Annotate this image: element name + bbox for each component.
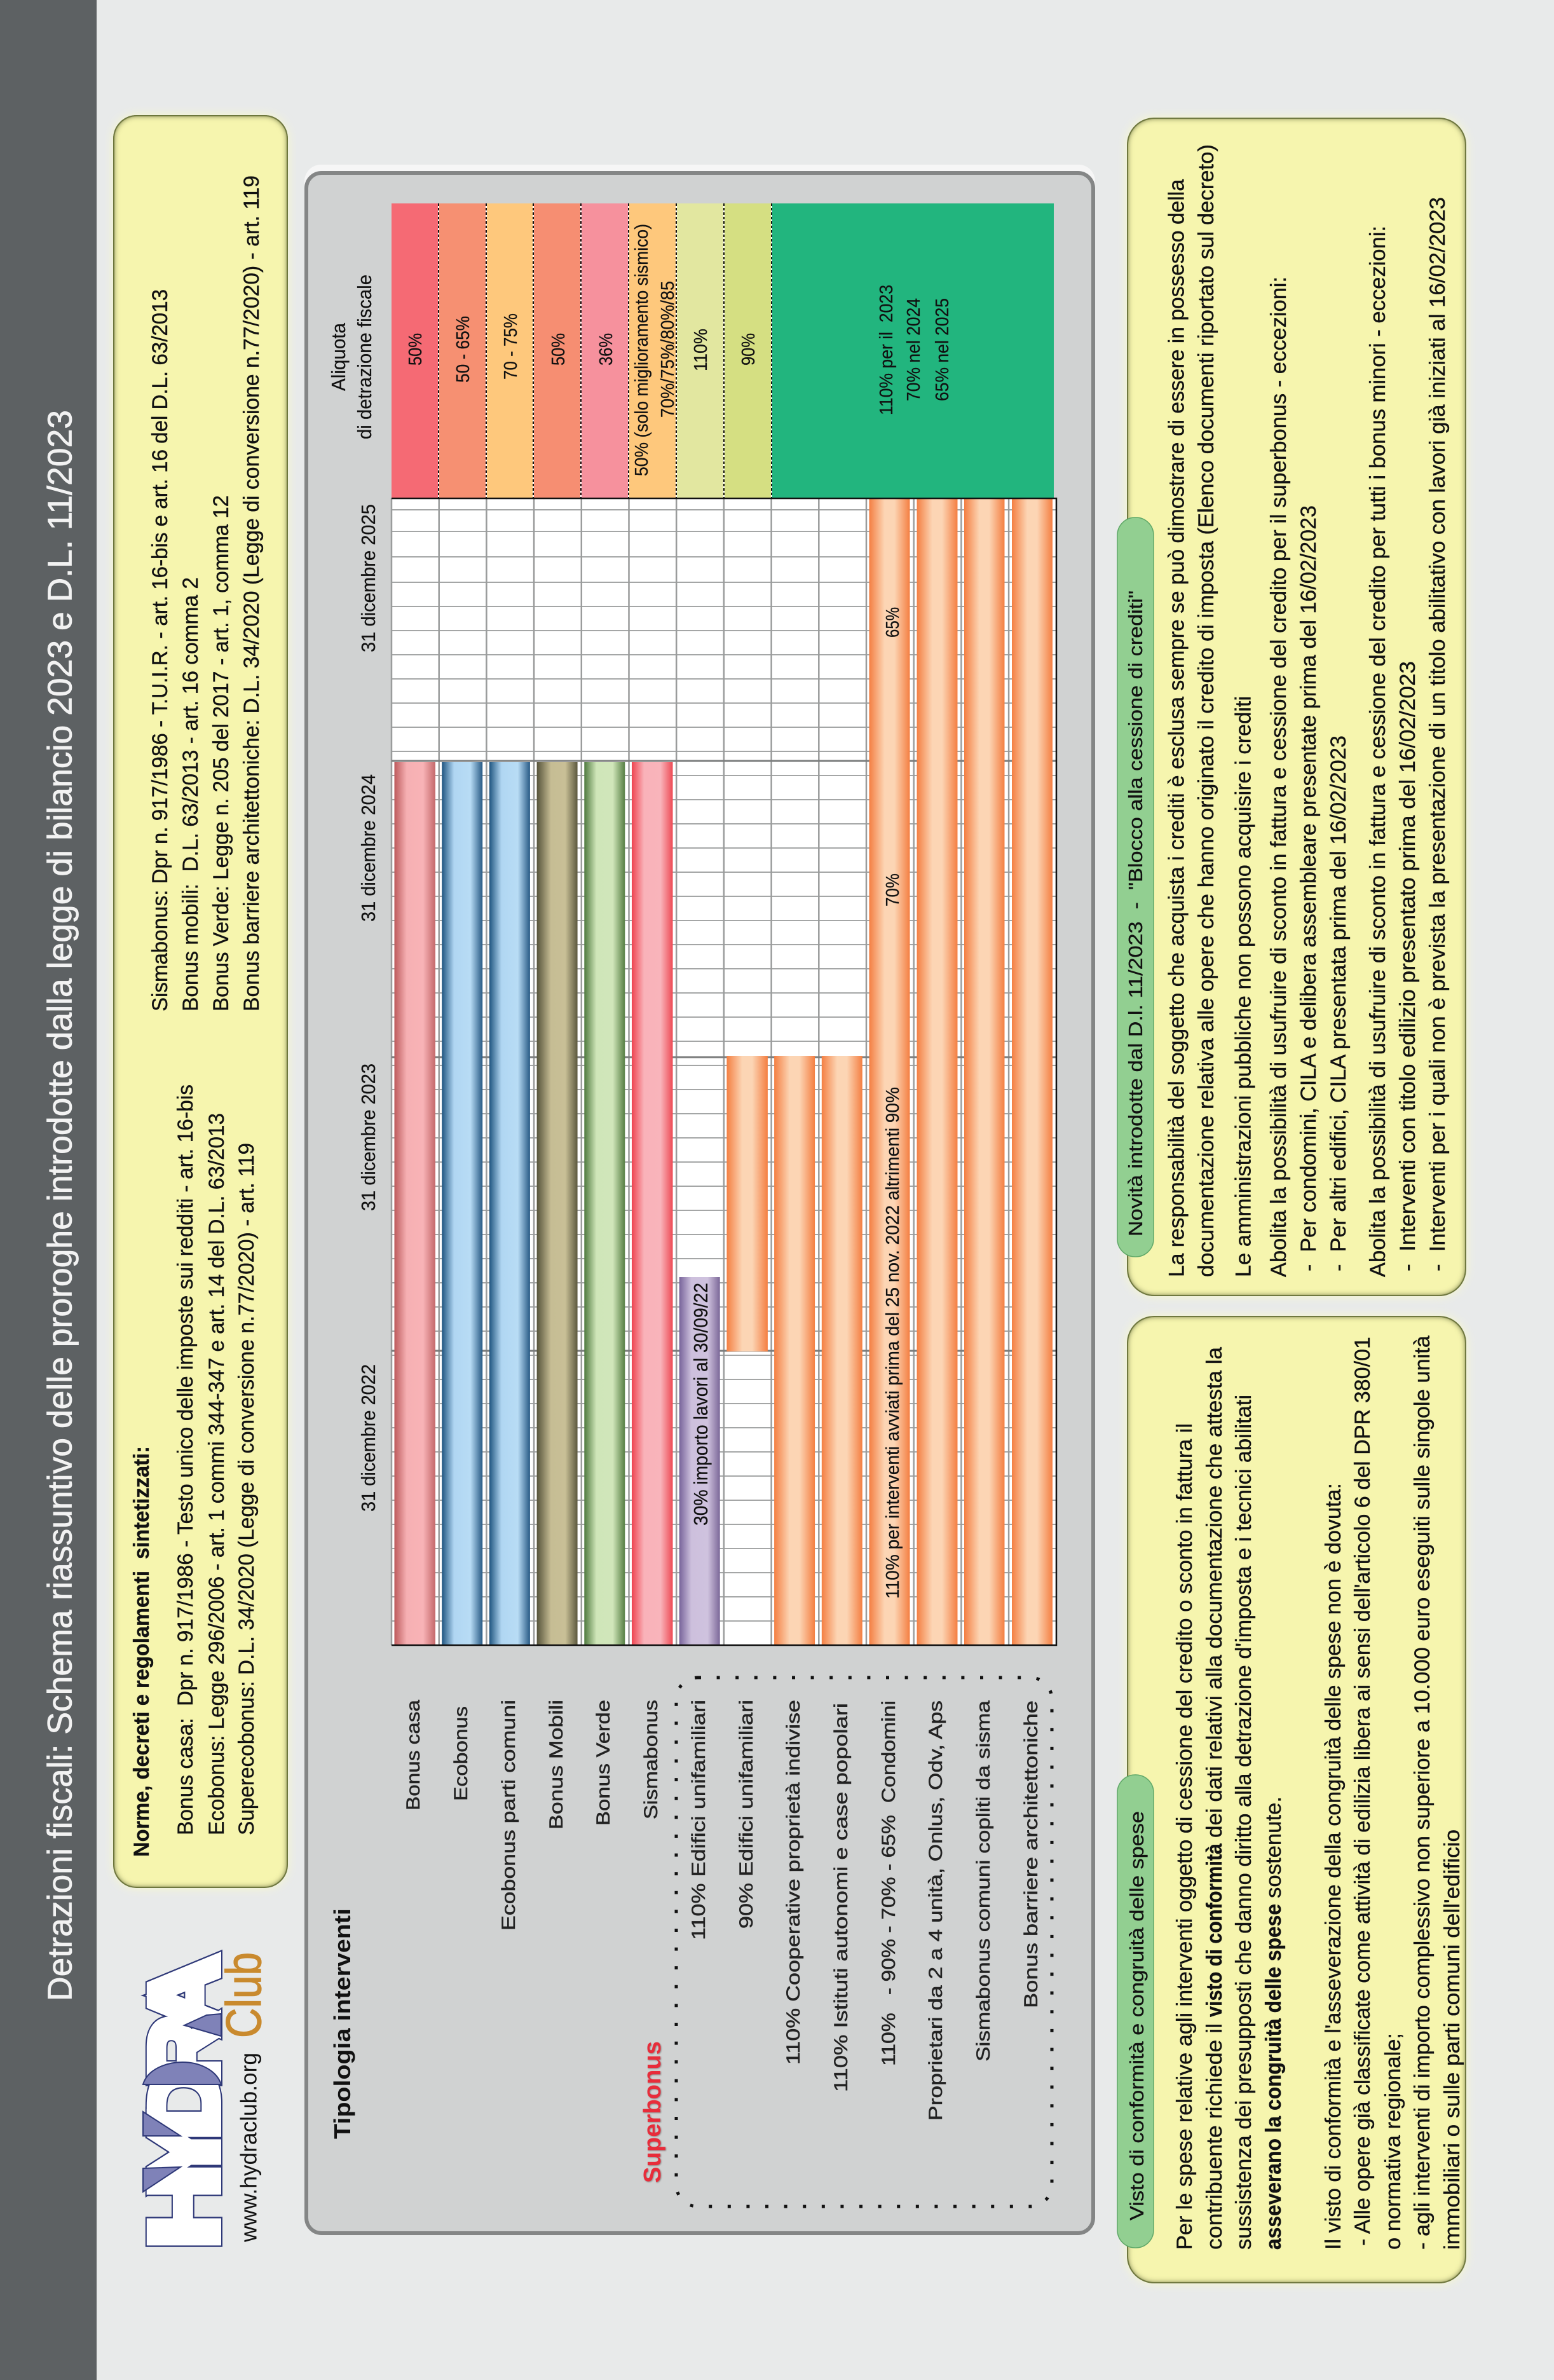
date axis labels: 31 dicembre 2023 (357, 1063, 379, 1211)
heading: norme: Norme, decreti e regolamenti sintetizzati: (130, 1446, 154, 1857)
bar: Bonus Verde (584, 762, 625, 1645)
aliquota values: 70% nel 2024 (904, 298, 924, 401)
text block: norme right column: Sismabonus: Dpr n. 917/1986 - T.U.I.R. - art. 16-bis e art. 16 del D.L. 63/2013 (148, 289, 172, 1011)
aliquota values: 110% (691, 329, 711, 371)
aliquota values: 50% (549, 333, 569, 366)
superbonus dotted group outline (676, 1678, 1052, 2206)
title: Detrazioni fiscali: Schema riassuntivo delle proroghe introdotte dalla legge di bilancio 2023 e D.L. 11/2023 (41, 410, 79, 2001)
bar: sismabonus comuni (964, 499, 1004, 1645)
text block: visto body: immobiliari o sulle parti comuni dell'edificio (1440, 1829, 1464, 2250)
text block: visto body: contribuente richiede il (1203, 2023, 1227, 2250)
row labels: Proprietari da 2 a 4 unità, Onlus, Odv, Aps (925, 1700, 946, 2121)
date axis labels: 31 dicembre 2022 (357, 1364, 379, 1512)
bar: 90% edifici unifamiliari (726, 1056, 768, 1351)
text block: norme right column: Bonus barriere architettoniche: D.L. 34/2020 (Legge di conversione n.77/2020) - art. 119 (240, 175, 264, 1011)
panel: visto di conformità (1117, 1317, 1466, 2283)
text block: novità body: documentazione relativa alle opere che hanno originato il credito di imposta (Elenco documenti riportato sul decreto) (1194, 144, 1218, 1277)
aliquota values: 90% (739, 333, 759, 366)
logo: Hydra Club: Club (215, 1952, 271, 2038)
tab heading: novità (1117, 517, 1154, 1257)
aliquota values: 70%/75%/80%/85 (658, 281, 678, 418)
heading: aliquota: di detrazione fiscale (353, 275, 376, 439)
aliquota values: 50% (406, 333, 426, 366)
bar: condomini (869, 499, 910, 1645)
aliquota values: 70 - 75% (501, 313, 521, 380)
tab heading: visto (1117, 1775, 1154, 2248)
tab heading: novità: Novità introdotte dal D.l. 11/2023 - "Blocco alla cessione di crediti" (1124, 591, 1147, 1236)
aliquota values: 50 - 65% (453, 316, 474, 383)
text block: novità body: - Interventi per i quali non è prevista la presentazione di un titolo abilitativo con lavori già iniziati al 16/02/2023 (1426, 197, 1450, 1271)
panel: schema chart (304, 165, 1095, 2235)
bar: cooperative (774, 1056, 815, 1645)
text block: visto body: sostenute. (1262, 1796, 1286, 1898)
heading: aliquota (327, 275, 376, 439)
logo: Hydra Club: A (130, 1956, 237, 2034)
row labels (403, 1700, 1042, 2121)
text block: visto body: - Alle opere già classificate come attività di edilizia libera ai sensi dell'articolo 6 del DPR 380/01 (1351, 1337, 1375, 2246)
logo: Hydra Club: D (130, 2062, 237, 2139)
aliquota colour column (392, 203, 1054, 498)
aliquota values: 110% per il 2023 (876, 285, 897, 415)
row labels: Bonus Mobili (546, 1700, 567, 1829)
text block: visto body: o normativa regionale; (1381, 2033, 1405, 2250)
text block: norme right column: Bonus mobili: D.L. 63/2013 - art. 16 comma 2 (179, 577, 203, 1011)
text block: norme right column (148, 175, 264, 1011)
text block: norme left column: Bonus casa: Dpr n. 917/1986 - Testo unico delle imposte sui redditi - art. 16-bis (174, 1084, 198, 1835)
aliquota values: 50% (solo miglioramento sismico) (632, 224, 652, 476)
logo: Hydra Club: Y (130, 2116, 237, 2188)
bar: proprietari (917, 499, 957, 1645)
date axis labels: 31 dicembre 2025 (357, 504, 379, 652)
logo: Hydra Club: R (130, 2016, 237, 2087)
row labels: 110% Istituti autonomi e case popolari (831, 1703, 852, 2092)
bar: condomini: 65% (883, 607, 903, 638)
row labels: Bonus barriere architettoniche (1021, 1700, 1042, 2008)
text block: visto body: sussistenza dei presupposti che danno diritto alla detrazione d'imposta e i tecnici abilitati (1232, 1395, 1256, 2250)
bar: Ecobonus (442, 762, 482, 1645)
text block: visto body: Per le spese relative agli interventi oggetto di cessione del credito o sconto in fattura il (1173, 1423, 1197, 2250)
text block: visto body (1173, 1336, 1464, 2250)
text block: norme left column (174, 1084, 259, 1835)
superbonus label: Superbonus (639, 2041, 666, 2183)
header band with title (0, 0, 97, 2380)
text block: visto body: Il visto di conformità e l'asseverazione della congruità delle spese non è dovuta: (1321, 1483, 1346, 2250)
tab heading: visto: Visto di conformità e congruità delle spese (1126, 1811, 1148, 2220)
text block: novità body: Le amministrazioni pubbliche non possono acquisire i crediti (1232, 696, 1256, 1277)
text block: novità body: - Interventi con titolo edilizio presentato prima del 16/02/2023 (1396, 661, 1420, 1271)
text block: visto body: dei dati relativi alla documentazione che attesta la (1203, 1347, 1227, 1838)
aliquota values (406, 224, 953, 476)
bar: istituti autonomi (822, 1056, 862, 1645)
heading: tipologia interventi: Tipologia interventi (329, 1908, 355, 2139)
row labels: 110% Cooperative proprietà indivise (783, 1700, 804, 2065)
row labels: 90% Edifici unifamiliari (736, 1700, 757, 1929)
text block: norme right column: Bonus Verde: Legge n. 205 del 2017 - art. 1, comma 12 (209, 495, 233, 1011)
bar: barriere architettoniche (1012, 499, 1053, 1645)
text block: visto body: asseverano la congruità delle spese (1262, 1904, 1286, 2250)
text block: visto body: visto di conformità (1203, 1843, 1227, 2017)
bar: Sismabonus (632, 762, 672, 1645)
logo: Hydra Club: H (130, 2165, 237, 2248)
text block: novità body: Abolita la possibilità di usufruire di sconto in fattura e cessione del credito per tutti i bonus minori - eccezioni: (1366, 226, 1390, 1277)
text block: norme left column: Superecobonus: D.L. 34/2020 (Legge di conversione n.77/2020) - art. 119 (235, 1143, 259, 1835)
bar: Bonus Mobili (537, 762, 578, 1645)
date axis labels (357, 504, 379, 1512)
text block: novità body: - Per altri edifici, CILA presentata prima del 16/02/2023 (1326, 735, 1351, 1271)
logo: Hydra Club (130, 1952, 271, 2248)
text block: norme left column: Ecobonus: Legge 296/2006 - art. 1 commi 344-347 e art. 14 del D.L. 63/2013 (205, 1113, 229, 1835)
bar: 110% edifici unifamiliari (679, 1277, 720, 1645)
bar: condomini: 70% (883, 873, 903, 906)
logo: Hydra Club: A (130, 1956, 237, 2034)
row labels: Ecobonus (451, 1706, 472, 1801)
logo: Hydra Club: D (130, 2062, 237, 2139)
row labels: Bonus casa (403, 1700, 424, 1810)
row labels: 110% - 90% - 70% - 65% Condomini (878, 1700, 899, 2066)
panel: novità D.L. 11/2023 (1117, 118, 1466, 1296)
text block: novità body: Abolita la possibilità di usufruire di sconto in fattura e cessione del credito per il superbonus - eccezioni: (1267, 277, 1291, 1277)
aliquota values: 36% (596, 333, 617, 366)
logo: Hydra Club: H (130, 2165, 237, 2248)
gantt chart (392, 498, 1056, 1645)
bar: 110% edifici unifamiliari: 30% importo lavori al 30/09/22 (690, 1283, 712, 1526)
aliquota values: 65% nel 2025 (932, 298, 953, 401)
text block: novità body (1164, 144, 1450, 1277)
row labels: Sismabonus comuni copliti da sisma (973, 1700, 994, 2062)
row labels: 110% Edifici unifamiliari (688, 1700, 709, 1940)
logo: Hydra Club: R (130, 2016, 237, 2087)
row labels: Sismabonus (641, 1700, 662, 1819)
panel: norme, decreti e regolamenti (114, 116, 287, 1887)
bar: Bonus casa (394, 762, 435, 1645)
row labels: Bonus Verde (593, 1700, 614, 1826)
bar: Ecobonus parti comuni (489, 762, 530, 1645)
text block: novità body: La responsabilità del soggetto che acquista i crediti è esclusa sempre se può dimostrare di essere in possesso della (1164, 179, 1189, 1277)
heading: aliquota: Aliquota (327, 322, 350, 391)
bar: condomini: 110% per interventi avviati prima del 25 nov. 2022 altrimenti 90% (883, 1087, 903, 1599)
date axis labels: 31 dicembre 2024 (357, 774, 379, 922)
logo: Hydra Club: www.hydraclub.org (235, 2053, 262, 2243)
row labels: Ecobonus parti comuni (498, 1700, 519, 1931)
text block: novità body: - Per condomini, CILA e delibera assembleare presentate prima del 16/02/2023 (1297, 505, 1321, 1271)
logo: Hydra Club: Y (130, 2116, 237, 2188)
text block: visto body: - agli interventi di importo complessivo non superiore a 10.000 euro eseguiti sulle singole unità (1410, 1336, 1435, 2250)
